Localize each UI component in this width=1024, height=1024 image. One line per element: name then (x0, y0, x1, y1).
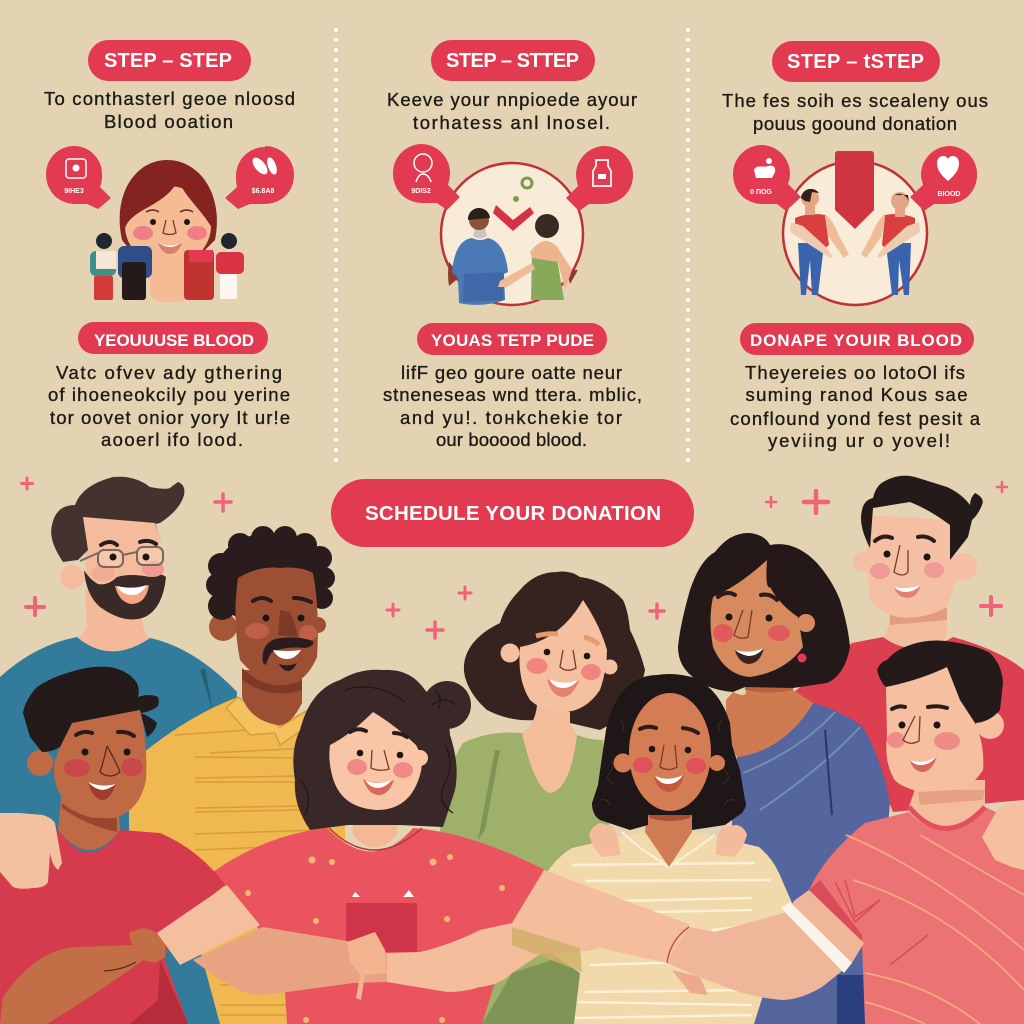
hand on left shoulder (0, 813, 62, 889)
body text 1: Vatc ofvev ady gthering (56, 362, 282, 383)
icon: left bubble 2: 9DIS2 (411, 188, 431, 195)
intro text 3: The fes soih es scealeny ous (722, 90, 988, 111)
man at front right with pink shirt (809, 641, 1024, 1024)
icon: right bubble 1 (225, 146, 294, 209)
call to action button: SCHEDULE YOUR DONATION (365, 502, 661, 525)
section badge 1 (78, 322, 268, 354)
step badge 2 (431, 40, 595, 81)
man with curly hair and yellow shirt (129, 526, 345, 1024)
step badge 1 (88, 40, 251, 81)
intro text 3: pouus goound donation (753, 113, 957, 134)
intro text 2: torhatess anl lnosel. (413, 112, 610, 133)
body text 3: yeviing ur o yovel! (768, 430, 950, 451)
panel: step 2 (383, 40, 642, 450)
illustration: group of people (0, 476, 1024, 1024)
intro text 2 (387, 89, 637, 133)
body text 3: Theyereies oo lotoOl ifs (745, 362, 965, 383)
woman with curly bun and red top (213, 670, 545, 1024)
section badge 2: YOUAS TETP PUDE (431, 331, 594, 350)
intro text 1 (44, 88, 295, 132)
panel: step 1 (44, 40, 295, 450)
section badge 1: YEOUUUSE BLOOD (94, 331, 254, 350)
man at back right with red shirt (793, 476, 1024, 812)
icon: left bubble 3 (733, 145, 801, 211)
body text 3: conflound yond fest pesit a (730, 408, 981, 429)
body text 3: suming rаnod Kous sae (746, 384, 968, 405)
step badge 2: STEP – STTEP (446, 50, 579, 72)
body text 1: aooerl ifo lood. (101, 429, 243, 450)
section badge 2 (417, 323, 607, 355)
body text 2: lifF geo goure oatte neur (401, 362, 622, 383)
section badge 3 (740, 323, 974, 355)
illustration: big face with small people (90, 160, 244, 302)
intro text 1: Blood ooation (104, 111, 233, 132)
icon: right bubble 3 (910, 146, 977, 211)
icon: left bubble 3: 0 ПOG (750, 189, 772, 196)
intro text 1: To conthasterl geoe nloosd (44, 88, 295, 109)
body text 1: tor oovet onior yory It ur!e (50, 407, 290, 428)
icon: right bubble 1: $6.8A8 (252, 188, 274, 195)
step badge 3 (772, 41, 940, 82)
icon: left bubble 1: 9IHE3 (64, 188, 84, 195)
illustration: two donors circle (783, 151, 927, 305)
step badge 1: STEP – STEP (104, 50, 232, 72)
icon: left bubble 1 (46, 146, 111, 209)
section badge 3: DONAPE YOUIR BLOOD (750, 331, 962, 350)
hands on shoulders (589, 823, 620, 857)
icon: left bubble 2 (393, 144, 460, 210)
man with glasses and teal shirt (0, 477, 237, 1024)
woman with blue top (678, 533, 890, 1024)
body text 1 (48, 362, 290, 450)
icon: right bubble 2 (566, 146, 633, 211)
intro text 2: Keeve your nnpioede ayour (387, 89, 637, 110)
body text 2: stnenesеas wnd ttera. mblic, (383, 384, 642, 405)
body text 2: and yu!. toнkchеkіe tor (400, 407, 622, 428)
icon: right bubble 3: BIOOD (938, 191, 960, 198)
call to action button (331, 479, 694, 547)
intro text 3 (722, 90, 988, 134)
right donor (861, 192, 920, 295)
body text 1: of ihoeneokcily pou yerine (48, 384, 290, 405)
woman with striped top (512, 674, 792, 1024)
boy at front left with red shirt (0, 667, 225, 1024)
body text 3 (730, 362, 981, 451)
left donor (790, 189, 849, 295)
illustration: two people circle (441, 163, 583, 305)
woman with green top (440, 572, 645, 1024)
step badge 3: STEP – tSTEP (787, 51, 924, 73)
panel: step 3 (722, 41, 988, 451)
joined arms (0, 870, 864, 1024)
body text 2 (383, 362, 642, 450)
body text 2: our booood blood. (436, 429, 587, 450)
